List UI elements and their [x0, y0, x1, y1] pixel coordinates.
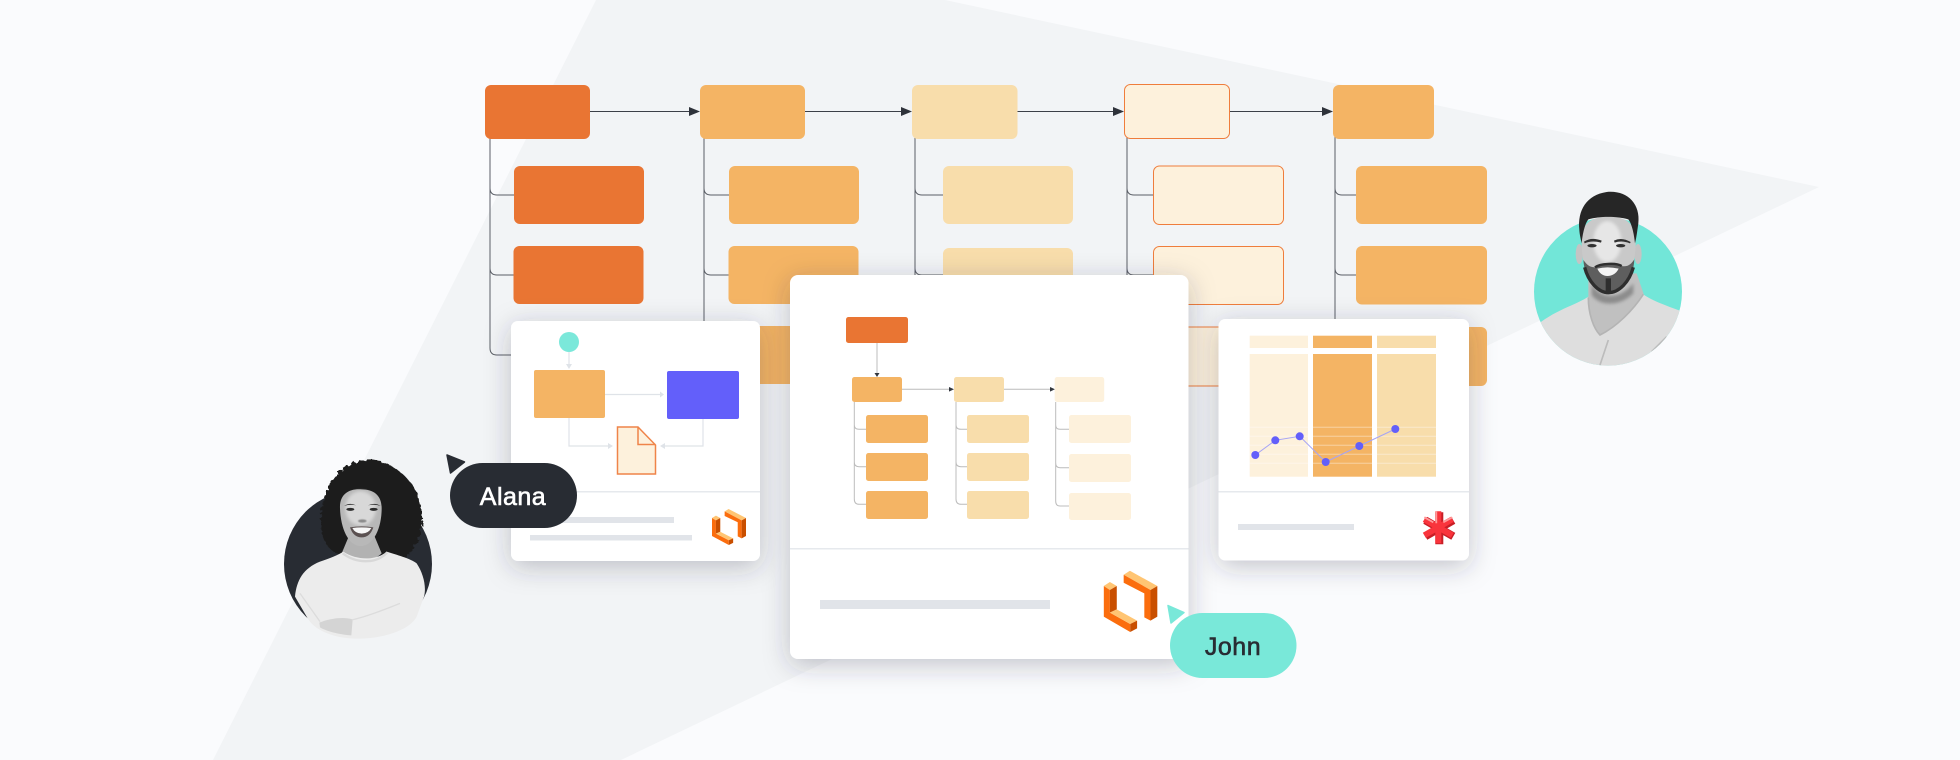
- swimlane columns: [1250, 354, 1308, 477]
- connector arrows between column headers: [590, 107, 1333, 116]
- mini column 3: [1055, 377, 1131, 520]
- sweater: [295, 552, 425, 639]
- avatar: Alana portrait: [284, 460, 432, 639]
- collar: [343, 552, 387, 561]
- column 5: [1333, 85, 1487, 386]
- mini chart connectors: [854, 343, 1069, 506]
- card divider: [511, 491, 760, 492]
- purple process box: [667, 371, 739, 419]
- card divider: [790, 548, 1188, 550]
- eyes and brows: [1584, 239, 1631, 247]
- top node: [846, 317, 908, 343]
- column 1: [485, 85, 644, 384]
- mini chart arrowheads: [874, 373, 1055, 392]
- cursor: Alana: [447, 455, 577, 528]
- nose shadow: [358, 519, 367, 523]
- flow connectors: [566, 352, 703, 449]
- label pill: Alana: Alana: [480, 483, 546, 511]
- card: flow diagram: [511, 321, 760, 561]
- chin shadow: [1592, 283, 1633, 304]
- card: chart: [1218, 319, 1469, 560]
- column 4: [1124, 84, 1284, 386]
- orange process box: [534, 370, 605, 418]
- caption placeholder bar: [820, 600, 1050, 609]
- caption placeholder bar: [1238, 524, 1354, 530]
- mini column 2: [954, 377, 1029, 519]
- card: org flow chart (centre): [790, 275, 1188, 659]
- icon: red asterisk: [1424, 511, 1453, 544]
- card divider: [1218, 491, 1469, 492]
- column 2: [700, 85, 859, 384]
- branch lines: [490, 135, 1356, 356]
- large process flowchart: [485, 84, 1487, 386]
- icon: orange logo large: [1104, 570, 1158, 632]
- document shape: [618, 427, 656, 474]
- mini column 1: [852, 377, 928, 519]
- smile: [350, 526, 373, 537]
- mouth: [1597, 267, 1619, 276]
- label pill: John: John: [1205, 633, 1261, 661]
- caption placeholder bars: [530, 517, 692, 540]
- cursor: John: [1168, 606, 1296, 678]
- ears: [1576, 244, 1583, 264]
- face: [340, 489, 382, 546]
- beard: [1583, 259, 1634, 293]
- face: [1582, 217, 1636, 293]
- swimlane headers: [1250, 336, 1308, 348]
- hair: [1579, 192, 1639, 243]
- neck: [342, 535, 382, 561]
- crossed arms: [319, 618, 353, 635]
- start circle: [559, 332, 579, 352]
- avatar: John portrait: [1533, 192, 1687, 373]
- icon: orange logo: [712, 509, 746, 545]
- eyes and brows: [344, 504, 381, 511]
- line chart: [1251, 425, 1399, 466]
- curly hair: [321, 460, 422, 562]
- t-shirt: [1540, 295, 1680, 366]
- neck and chest: [1588, 273, 1644, 335]
- column 3: [912, 85, 1073, 384]
